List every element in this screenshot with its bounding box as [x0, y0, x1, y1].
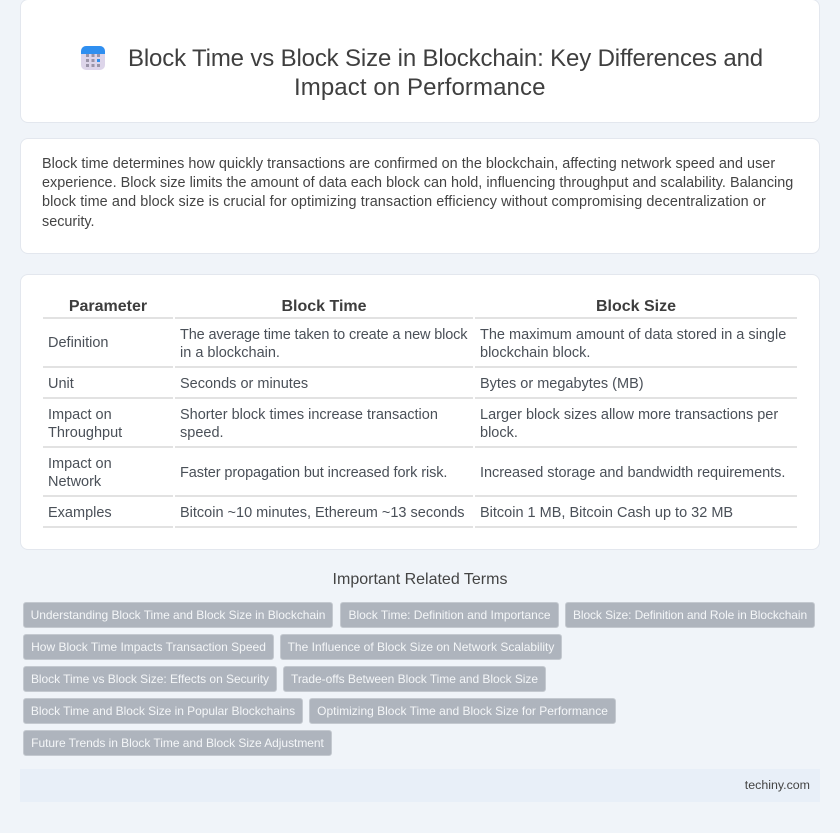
title: Impact on Performance [294, 74, 546, 101]
related term tags: Block Time vs Block Size: Effects on Security [31, 672, 269, 686]
footer [20, 769, 820, 802]
row: examples: Bitcoin 1 MB, Bitcoin Cash up to 32 MB [480, 505, 733, 521]
table header: Block Size [596, 298, 676, 315]
row: impact on network: Increased storage and bandwidth requirements. [480, 465, 785, 481]
row: definition [48, 327, 786, 361]
header card [20, 0, 820, 123]
row: definition: The average time taken to create a new block [180, 327, 467, 343]
row: impact on throughput: Larger block sizes allow more transactions per [480, 407, 778, 423]
row: impact on network: Network [48, 474, 101, 490]
related term tags: Block Time and Block Size in Popular Blockchains [31, 704, 295, 718]
row: impact on throughput: Shorter block times increase transaction [180, 407, 438, 423]
row: examples [48, 505, 733, 521]
footer credit: techiny.com [745, 778, 810, 792]
related term tags [23, 602, 815, 756]
intro text: experience. Block size limits the amount of data each block can hold, influencing throughput and scalability. Balancing [42, 175, 793, 191]
related term tags: Optimizing Block Time and Block Size for Performance [317, 704, 608, 718]
row: definition: in a blockchain. [180, 345, 280, 361]
related term tags: Trade-offs Between Block Time and Block Size [291, 672, 538, 686]
row: impact on throughput: speed. [180, 425, 224, 441]
row: definition: The maximum amount of data stored in a single [480, 327, 786, 343]
intro panel [20, 138, 820, 254]
row: impact on throughput: Impact on [48, 407, 112, 423]
row: impact on network [48, 456, 785, 490]
table header: Block Time [281, 298, 367, 315]
intro text: security. [42, 214, 95, 230]
row: unit [48, 376, 644, 392]
related term tags: Block Time: Definition and Importance [348, 608, 551, 622]
related term tags: Understanding Block Time and Block Size in Blockchain [31, 608, 325, 622]
comparison table [43, 298, 797, 528]
row: impact on network: Impact on [48, 456, 112, 472]
related term tags: How Block Time Impacts Transaction Speed [31, 640, 266, 654]
related terms heading: Important Related Terms [333, 571, 507, 588]
intro text [42, 156, 793, 230]
row: unit: Seconds or minutes [180, 376, 308, 392]
row: examples: Examples [48, 505, 112, 521]
table header: Parameter [69, 298, 147, 315]
intro text: Block time determines how quickly transactions are confirmed on the blockchain, affecting network speed and user [42, 156, 775, 172]
row: unit: Unit [48, 376, 74, 392]
title [128, 45, 763, 101]
table header [69, 298, 676, 315]
icon: calendar [81, 46, 105, 70]
row: impact on throughput: block. [480, 425, 518, 441]
row: examples: Bitcoin ~10 minutes, Ethereum ~13 seconds [180, 505, 465, 521]
row: impact on throughput [48, 407, 778, 441]
intro text: block time and block size is crucial for optimizing transaction efficiency without compromising decentralization or [42, 194, 766, 210]
related term tags: The Influence of Block Size on Network Scalability [288, 640, 554, 654]
related term tags: Block Size: Definition and Role in Blockchain [573, 608, 807, 622]
title: Block Time vs Block Size in Blockchain: Key Differences and [128, 45, 763, 72]
row: impact on throughput: Throughput [48, 425, 122, 441]
related term tags: Future Trends in Block Time and Block Size Adjustment [31, 736, 324, 750]
row: definition: Definition [48, 335, 108, 351]
row: impact on network: Faster propagation but increased fork risk. [180, 465, 447, 481]
table panel [20, 274, 820, 550]
row: unit: Bytes or megabytes (MB) [480, 376, 644, 392]
row: definition: blockchain block. [480, 345, 590, 361]
